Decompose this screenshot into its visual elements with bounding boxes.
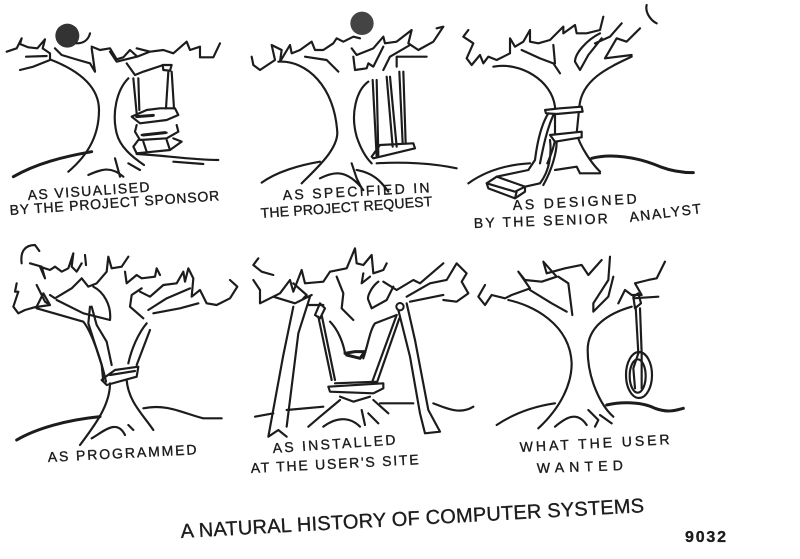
- right ground: [137, 154, 218, 164]
- rope wrapped around trunk: [545, 107, 583, 142]
- tree canopy and supports: [253, 248, 468, 437]
- right ground: [592, 156, 693, 173]
- swing: [315, 303, 399, 393]
- caption: as designed by the senior analyst: [474, 191, 702, 231]
- caption: as specified in the project request: [260, 179, 433, 221]
- icon: dark sun: [350, 12, 374, 35]
- tree: [7, 33, 220, 177]
- panel: as specified in the project request: [252, 12, 457, 192]
- caption: as installed at the user's site: AS INSTALLED: [272, 431, 396, 456]
- swing: [372, 72, 415, 158]
- ground: [13, 152, 92, 177]
- caption: as programmed: AS PROGRAMMED: [47, 441, 197, 465]
- caption: as specified in the project request: THE PROJECT REQUEST: [260, 193, 433, 221]
- ground: [497, 403, 555, 425]
- tree: [463, 5, 657, 173]
- caption: as designed by the senior analyst: BY THE SENIOR: [474, 210, 608, 231]
- caption: as installed at the user's site: [250, 431, 419, 476]
- swing wrapped round trunk: [88, 307, 150, 385]
- tree: [478, 257, 665, 428]
- loose ropes: [497, 113, 557, 187]
- tree: [252, 27, 443, 192]
- figure number: 9032: [685, 529, 726, 546]
- panel: what the user wanted: [478, 257, 683, 428]
- title: A NATURAL HISTORY OF COMPUTER SYSTEMS: [180, 495, 645, 543]
- right ground: [143, 407, 222, 418]
- ground: [262, 162, 457, 183]
- caption: as specified in the project request: AS SPECIFIED IN: [282, 179, 430, 203]
- caption: as installed at the user's site: AT THE USER'S SITE: [250, 451, 419, 476]
- panel: as programmed: [13, 245, 237, 445]
- right ground: [607, 403, 683, 411]
- ground: [255, 403, 473, 417]
- caption: what the user wanted: WHAT THE USER: [519, 431, 670, 455]
- tree: [13, 245, 237, 445]
- ground: [17, 417, 100, 440]
- icon: dark sun: [55, 24, 79, 48]
- ground: [468, 163, 530, 183]
- panel: as installed at the user's site: [253, 248, 473, 437]
- knotted rope: [330, 315, 397, 358]
- caption: as designed by the senior analyst: AS DESIGNED: [512, 191, 637, 213]
- panel: as visualised by the project sponsor: [7, 24, 220, 177]
- swing: [132, 65, 182, 153]
- caption: as visualised by the project sponsor: BY THE PROJECT SPONSOR: [9, 187, 220, 218]
- caption: what the user wanted: [519, 431, 670, 476]
- tyre swing: [626, 293, 652, 398]
- swing seat: [487, 177, 525, 198]
- caption: as designed by the senior analyst: ANALYST: [628, 200, 702, 225]
- caption: what the user wanted: WANTED: [537, 457, 623, 476]
- panel: as designed by the senior analyst: [463, 5, 693, 198]
- stump beneath swing: [308, 397, 388, 427]
- caption: as visualised by the project sponsor: AS VISUALISED: [27, 179, 150, 203]
